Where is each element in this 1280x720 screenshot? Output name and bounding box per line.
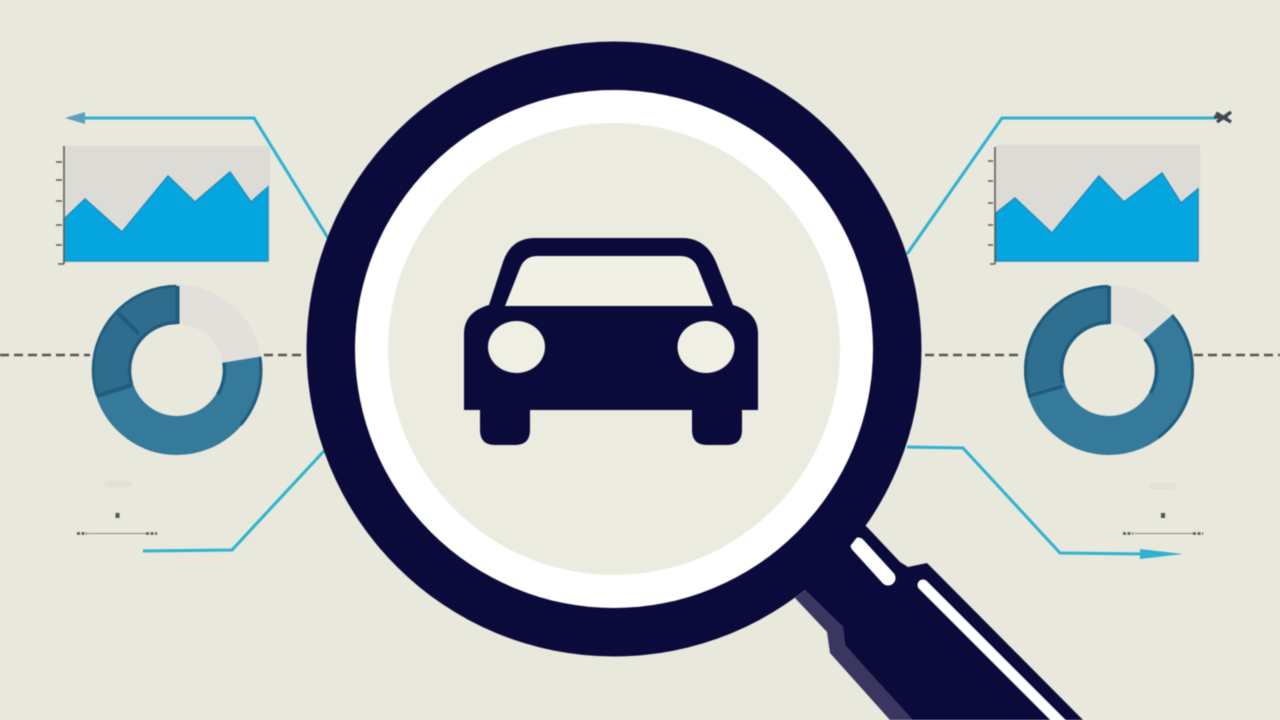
arrow: top left connector [65, 112, 328, 238]
handle highlight: long slot [923, 585, 1062, 720]
donut chart: left [93, 286, 261, 454]
scale marker: right [1123, 483, 1203, 534]
arrow: bottom right connector [907, 447, 1183, 559]
handle highlight: short slot [858, 545, 888, 578]
area chart: right [988, 145, 1200, 264]
scale marker: left [77, 481, 157, 534]
donut separators: left [97, 286, 178, 396]
area chart: left [56, 146, 270, 264]
donut separators: right [1028, 286, 1109, 396]
lens glass [388, 123, 840, 575]
lens frame [306, 42, 922, 656]
arrow: bottom left connector [143, 451, 324, 551]
arrow: top right connector [907, 112, 1231, 254]
handle shadow strip [795, 590, 915, 720]
handle [780, 510, 1083, 720]
magnifying glass [306, 42, 1083, 720]
icon: car [464, 238, 758, 445]
car headlight right [678, 321, 734, 373]
donut chart: right [1026, 286, 1192, 454]
car windshield [505, 256, 713, 306]
lens white ring [355, 90, 873, 608]
car headlight left [488, 321, 545, 373]
